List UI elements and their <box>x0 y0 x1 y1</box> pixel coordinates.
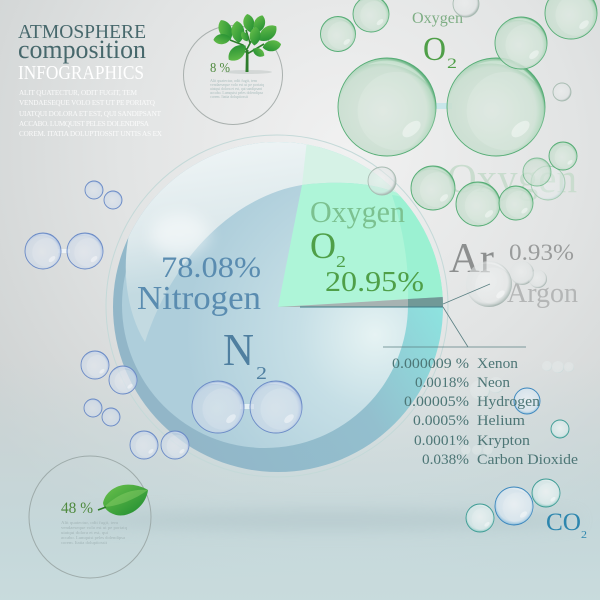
gas names: Xenon <box>477 356 519 372</box>
percentages: 0.0001% <box>414 433 469 449</box>
percentages: 0.00005% <box>404 394 469 410</box>
nitrogen inner sphere <box>122 162 408 448</box>
leader lines <box>383 284 526 347</box>
title: INFOGRAPHICS <box>18 62 144 84</box>
caption: corem. Itatia doluptiossit <box>210 95 248 99</box>
percentages: 0.000009 % <box>392 356 469 372</box>
caption: corem. Itatia doluptiossit <box>61 541 108 545</box>
carbon dioxide molecule: 2 <box>581 529 587 541</box>
oxygen title <box>412 10 463 72</box>
percentage: 8 % <box>210 61 230 76</box>
argon wedge <box>278 297 443 307</box>
oxygen title: O <box>423 31 446 68</box>
nitrogen highlight <box>126 142 320 342</box>
gas names: Hydrogen <box>477 394 541 410</box>
oxygen title: 2 <box>447 56 457 72</box>
oxygen wedge <box>278 183 443 307</box>
nitrogen bubbles <box>25 181 302 459</box>
icon: leaf <box>98 485 148 515</box>
faint oxygen text: Oxygen <box>447 155 577 201</box>
panel: 48 percent leaf circle <box>29 456 151 578</box>
intro paragraph: UIATQUI DOLORA ET EST, QUI SANDIPSANT <box>19 110 162 118</box>
caption: Alit quatectur, odit fugit, tem <box>61 521 118 526</box>
intro paragraph: ALIT QUATECTUR, ODIT FUGIT, TEM <box>19 89 138 97</box>
percentages: 0.0018% <box>415 375 469 391</box>
caption: uiatqui dolora et est, qui sandipsant <box>210 87 262 92</box>
oxygen labels <box>310 194 424 298</box>
caption: accabo. Lumquist peles dolendipsa <box>210 91 263 95</box>
argon bubbles <box>466 261 547 307</box>
argon labels: Ar <box>449 236 494 282</box>
oxygen labels: O <box>310 226 336 267</box>
oxygen title: Oxygen <box>412 10 463 27</box>
caption: vendaeseque volo est ut pe poriatq <box>210 83 264 87</box>
nitrogen labels: N <box>223 324 254 375</box>
percentages: 0.0005% <box>413 413 469 429</box>
nitrogen labels: 2 <box>256 363 267 383</box>
caption: uiatqui dolora et est, qui <box>61 531 108 536</box>
percentages: 0.038% <box>422 452 469 468</box>
trace gas list <box>392 356 578 468</box>
intro paragraph: COREM. ITATIA DOLUPTIOSSIT UNTIS AS EX <box>19 130 163 138</box>
intro paragraph <box>19 89 163 138</box>
title: ATMOSPHERE <box>18 21 146 43</box>
oxygen labels: 20.95% <box>325 266 424 298</box>
panel: 8 percent tree circle <box>184 13 282 125</box>
gas names: Carbon Dioxide <box>477 452 578 468</box>
caption: accabo. Lumquist peles dolendipsa <box>61 536 125 540</box>
argon labels: Argon <box>507 278 578 309</box>
gas names <box>477 356 578 468</box>
intro paragraph: ACCABO. LUMQUIST PELES DOLENDIPSA <box>19 120 150 128</box>
caption: Alit quatectur, odit fugit, tem <box>210 79 257 84</box>
carbon dioxide molecule <box>466 479 587 541</box>
argon labels: 0.93% <box>509 240 574 265</box>
gas names: Helium <box>477 413 525 429</box>
icon: tree <box>213 13 282 74</box>
nitrogen labels <box>137 251 267 383</box>
percentages <box>392 356 469 468</box>
gas names: Neon <box>477 375 510 391</box>
title <box>18 21 146 84</box>
caption: vendaeseque volo est ut pe poriatq <box>61 526 127 530</box>
oxygen bubbles <box>320 0 597 226</box>
gas names: Krypton <box>477 433 531 449</box>
title: composition <box>18 35 146 64</box>
percentage: 48 % <box>61 500 93 517</box>
trace gas bubbles <box>461 361 574 455</box>
oxygen outer wedge <box>302 144 398 194</box>
caption <box>210 79 264 99</box>
caption <box>61 521 127 545</box>
nitrogen labels: 78.08% <box>161 251 261 284</box>
big sphere pie chart <box>106 135 460 477</box>
oxygen labels: Oxygen <box>310 194 405 229</box>
nitrogen labels: Nitrogen <box>137 280 261 317</box>
oxygen labels: 2 <box>336 252 346 271</box>
intro paragraph: VENDAESEQUE VOLO EST UT PE PORIATQ <box>19 99 156 107</box>
argon labels <box>449 236 578 309</box>
carbon dioxide molecule: CO <box>546 509 581 536</box>
